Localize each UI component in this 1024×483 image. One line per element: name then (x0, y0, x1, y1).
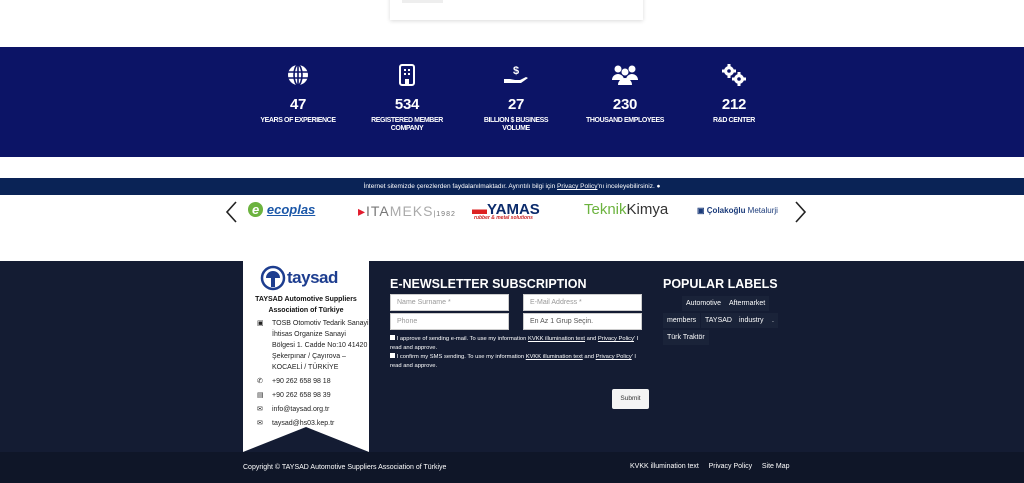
icon: globe (288, 65, 308, 85)
labels: members (667, 317, 696, 324)
logo: yamas: ▬YAMAS (472, 201, 540, 218)
contact list: ✆ (257, 378, 263, 385)
stat: employees: 230 (613, 96, 637, 113)
contact list: ✉ (257, 420, 263, 427)
stat: employees (586, 66, 664, 124)
icon: gears (722, 64, 746, 86)
submit button: Submit (620, 395, 641, 402)
logo: taysad: taysad (287, 268, 338, 287)
logo: colakoglu: ▣ Çolakoğlu Metalurji (697, 206, 778, 215)
contact list: +90 262 658 98 39 (272, 392, 331, 399)
logo: teknik kimya: TeknikKimya (584, 201, 668, 218)
logo: itameks: ▸ITAMEKS|1982 (358, 203, 456, 219)
bottom bar (0, 452, 1024, 483)
top card (390, 0, 643, 20)
contact list: +90 262 658 98 18 (272, 378, 331, 385)
icon: people (612, 66, 638, 85)
stat: years: YEARS OF EXPERIENCE (260, 117, 336, 124)
icon: building (399, 64, 415, 86)
newsletter form: En Az 1 Grup Seçin. (530, 318, 593, 325)
logo: ecoplas: e ecoplas (252, 202, 315, 217)
footer links: KVKK illumination text Privacy Policy Site Map (630, 463, 790, 470)
labels: Aftermarket (729, 300, 765, 307)
stat: employees: THOUSAND EMPLOYEES (586, 117, 664, 124)
stat: R&D: 212 (722, 96, 746, 113)
stat: volume: 27 (508, 96, 524, 113)
labels (667, 300, 774, 341)
labels: . (772, 317, 774, 324)
labels: Automotive (686, 300, 721, 307)
stat: members (371, 64, 444, 132)
labels: industry (739, 317, 764, 324)
contact list: ✉ (257, 406, 263, 413)
contact list (257, 320, 369, 427)
cookie bar (0, 178, 1024, 195)
newsletter form (390, 294, 649, 409)
stat: R&D: R&D CENTER (713, 117, 755, 124)
logo: taysad (260, 266, 338, 290)
newsletter form: Name Surname * (397, 299, 451, 306)
stat: volume: VOLUME (502, 125, 530, 132)
labels: Türk Traktör (667, 334, 705, 341)
icon: hand dollar: $ (513, 65, 519, 77)
cookie bar: İnternet sitemizde çerezlerden faydalanılmaktadır. Ayrıntılı bilgi için Privacy Policy'nı inceleyebilirsiniz. ● (364, 183, 660, 190)
stat: members: 534 (395, 96, 419, 113)
stat: years: 47 (290, 96, 306, 113)
contact list: taysad@hs03.kep.tr (272, 420, 334, 427)
logo carousel (226, 201, 806, 222)
stat: members: REGISTERED MEMBER (371, 117, 443, 124)
contact list: TOSB Otomotiv Tedarik Sanayi İhtisas Organize Sanayi Bölgesi 1. Cadde No:10 41420 Şekerpınar / Çayırova – KOCAELİ / TÜRKİYE (272, 320, 369, 371)
stat: volume (484, 65, 548, 132)
newsletter form: I confirm my SMS sending. To use my information KVKK illumination text and Privacy Policy' I read and approve. (390, 354, 636, 369)
footer (0, 261, 1024, 452)
submit button (612, 389, 649, 409)
arrow right (796, 202, 806, 222)
popular labels heading: POPULAR LABELS (663, 277, 778, 291)
labels: TAYSAD (705, 317, 732, 324)
icon: hand dollar (504, 65, 528, 83)
stats band (0, 47, 1024, 157)
logo: yamas: rubber & metal solutions (474, 215, 533, 221)
newsletter form: E-Mail Address * (530, 299, 582, 306)
stat: R&D (713, 64, 756, 124)
ribbon: contact (243, 261, 369, 452)
org name: Association of Türkiye (268, 307, 344, 314)
newsletter form: Phone (397, 318, 417, 325)
newsletter heading: E-NEWSLETTER SUBSCRIPTION (390, 277, 587, 291)
arrow left (226, 202, 236, 222)
copyright: Copyright © TAYSAD Automotive Suppliers Association of Türkiye (243, 464, 446, 471)
stat: years (260, 65, 336, 124)
newsletter form: I approve of sending e-mail. To use my information KVKK illumination text and Privacy Policy' I read and approve. (390, 336, 638, 351)
stat: members: COMPANY (391, 125, 423, 132)
contact list: ▤ (257, 392, 264, 399)
org name (255, 296, 357, 314)
stat: volume: BILLION $ BUSINESS (484, 117, 548, 124)
org name: TAYSAD Automotive Suppliers (255, 296, 357, 303)
contact list: ▣ (257, 320, 264, 327)
contact list: info@taysad.org.tr (272, 406, 329, 413)
